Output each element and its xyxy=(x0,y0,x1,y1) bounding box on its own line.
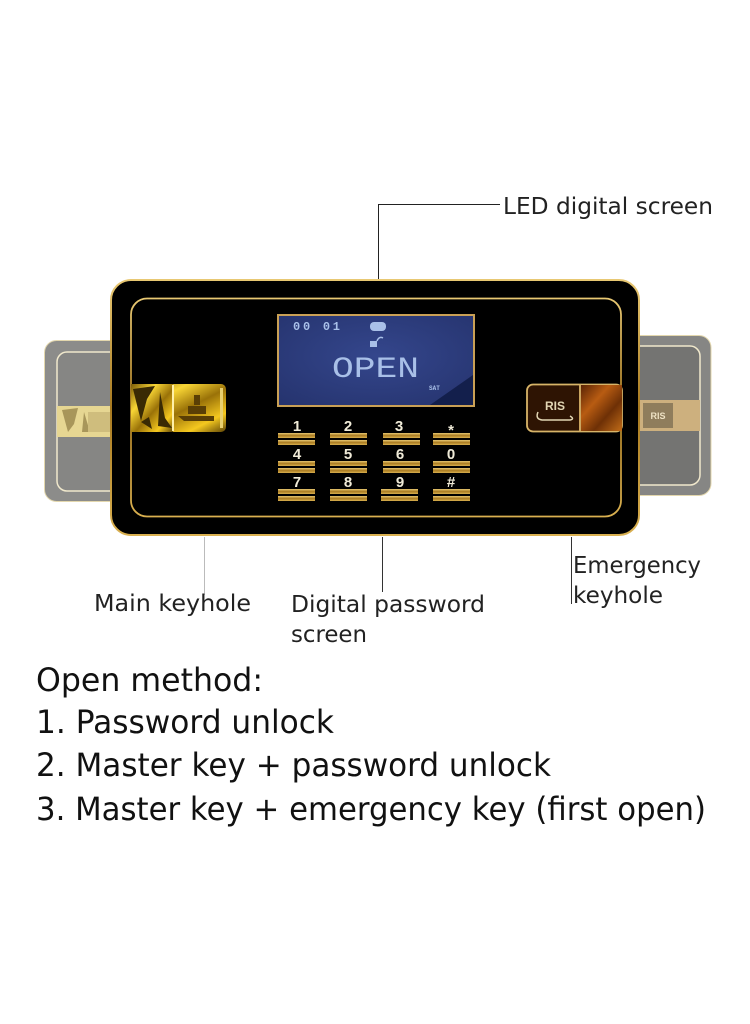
keypad: * xyxy=(448,422,454,439)
emergency keyhole xyxy=(527,384,622,432)
right sliding bolt (gray) xyxy=(625,336,711,496)
keypad: 4 xyxy=(293,446,302,463)
lock panel xyxy=(111,280,639,535)
callout: digital password screen xyxy=(291,537,485,648)
keypad: 8 xyxy=(344,474,352,491)
callout: digital password screen: screen xyxy=(291,622,367,648)
right sliding bolt (gray): RIS xyxy=(650,411,666,421)
keypad: 3 xyxy=(395,418,403,435)
left sliding bolt (gray) xyxy=(44,340,127,502)
callout: emergency keyhole: keyhole xyxy=(573,583,663,609)
callout: main keyhole: Main keyhole xyxy=(94,591,251,617)
keypad: # xyxy=(447,474,456,491)
callout: LED digital screen: LED digital screen xyxy=(503,194,713,220)
text block: open method: 1. Password unlock xyxy=(36,703,334,741)
keypad: 5 xyxy=(344,446,352,463)
text block: open method: 2. Master key + password unlock xyxy=(36,746,551,784)
keypad: 1 xyxy=(293,418,301,435)
keypad xyxy=(278,418,470,501)
callout: digital password screen: Digital password xyxy=(291,592,485,618)
LCD screen: OPEN xyxy=(332,353,419,387)
keypad: 9 xyxy=(396,474,404,491)
inner gold frame xyxy=(131,298,621,516)
keypad: 7 xyxy=(293,474,301,491)
main keyhole xyxy=(131,384,226,432)
LCD screen xyxy=(278,315,474,406)
callout: emergency keyhole xyxy=(572,537,701,609)
callout: emergency keyhole: Emergency xyxy=(573,553,701,579)
keypad: 2 xyxy=(344,418,352,435)
text block: open method: 3. Master key + emergency key (first open) xyxy=(36,790,706,828)
callout: LED digital screen xyxy=(378,194,713,279)
text block: open method xyxy=(36,661,706,828)
LCD screen: 00 01 xyxy=(293,320,340,334)
emergency keyhole: RIS xyxy=(545,399,565,413)
keypad: 6 xyxy=(396,446,404,463)
LCD screen: SAT xyxy=(429,385,440,392)
keypad: 0 xyxy=(447,446,455,463)
text block: open method: Open method: xyxy=(36,661,263,699)
